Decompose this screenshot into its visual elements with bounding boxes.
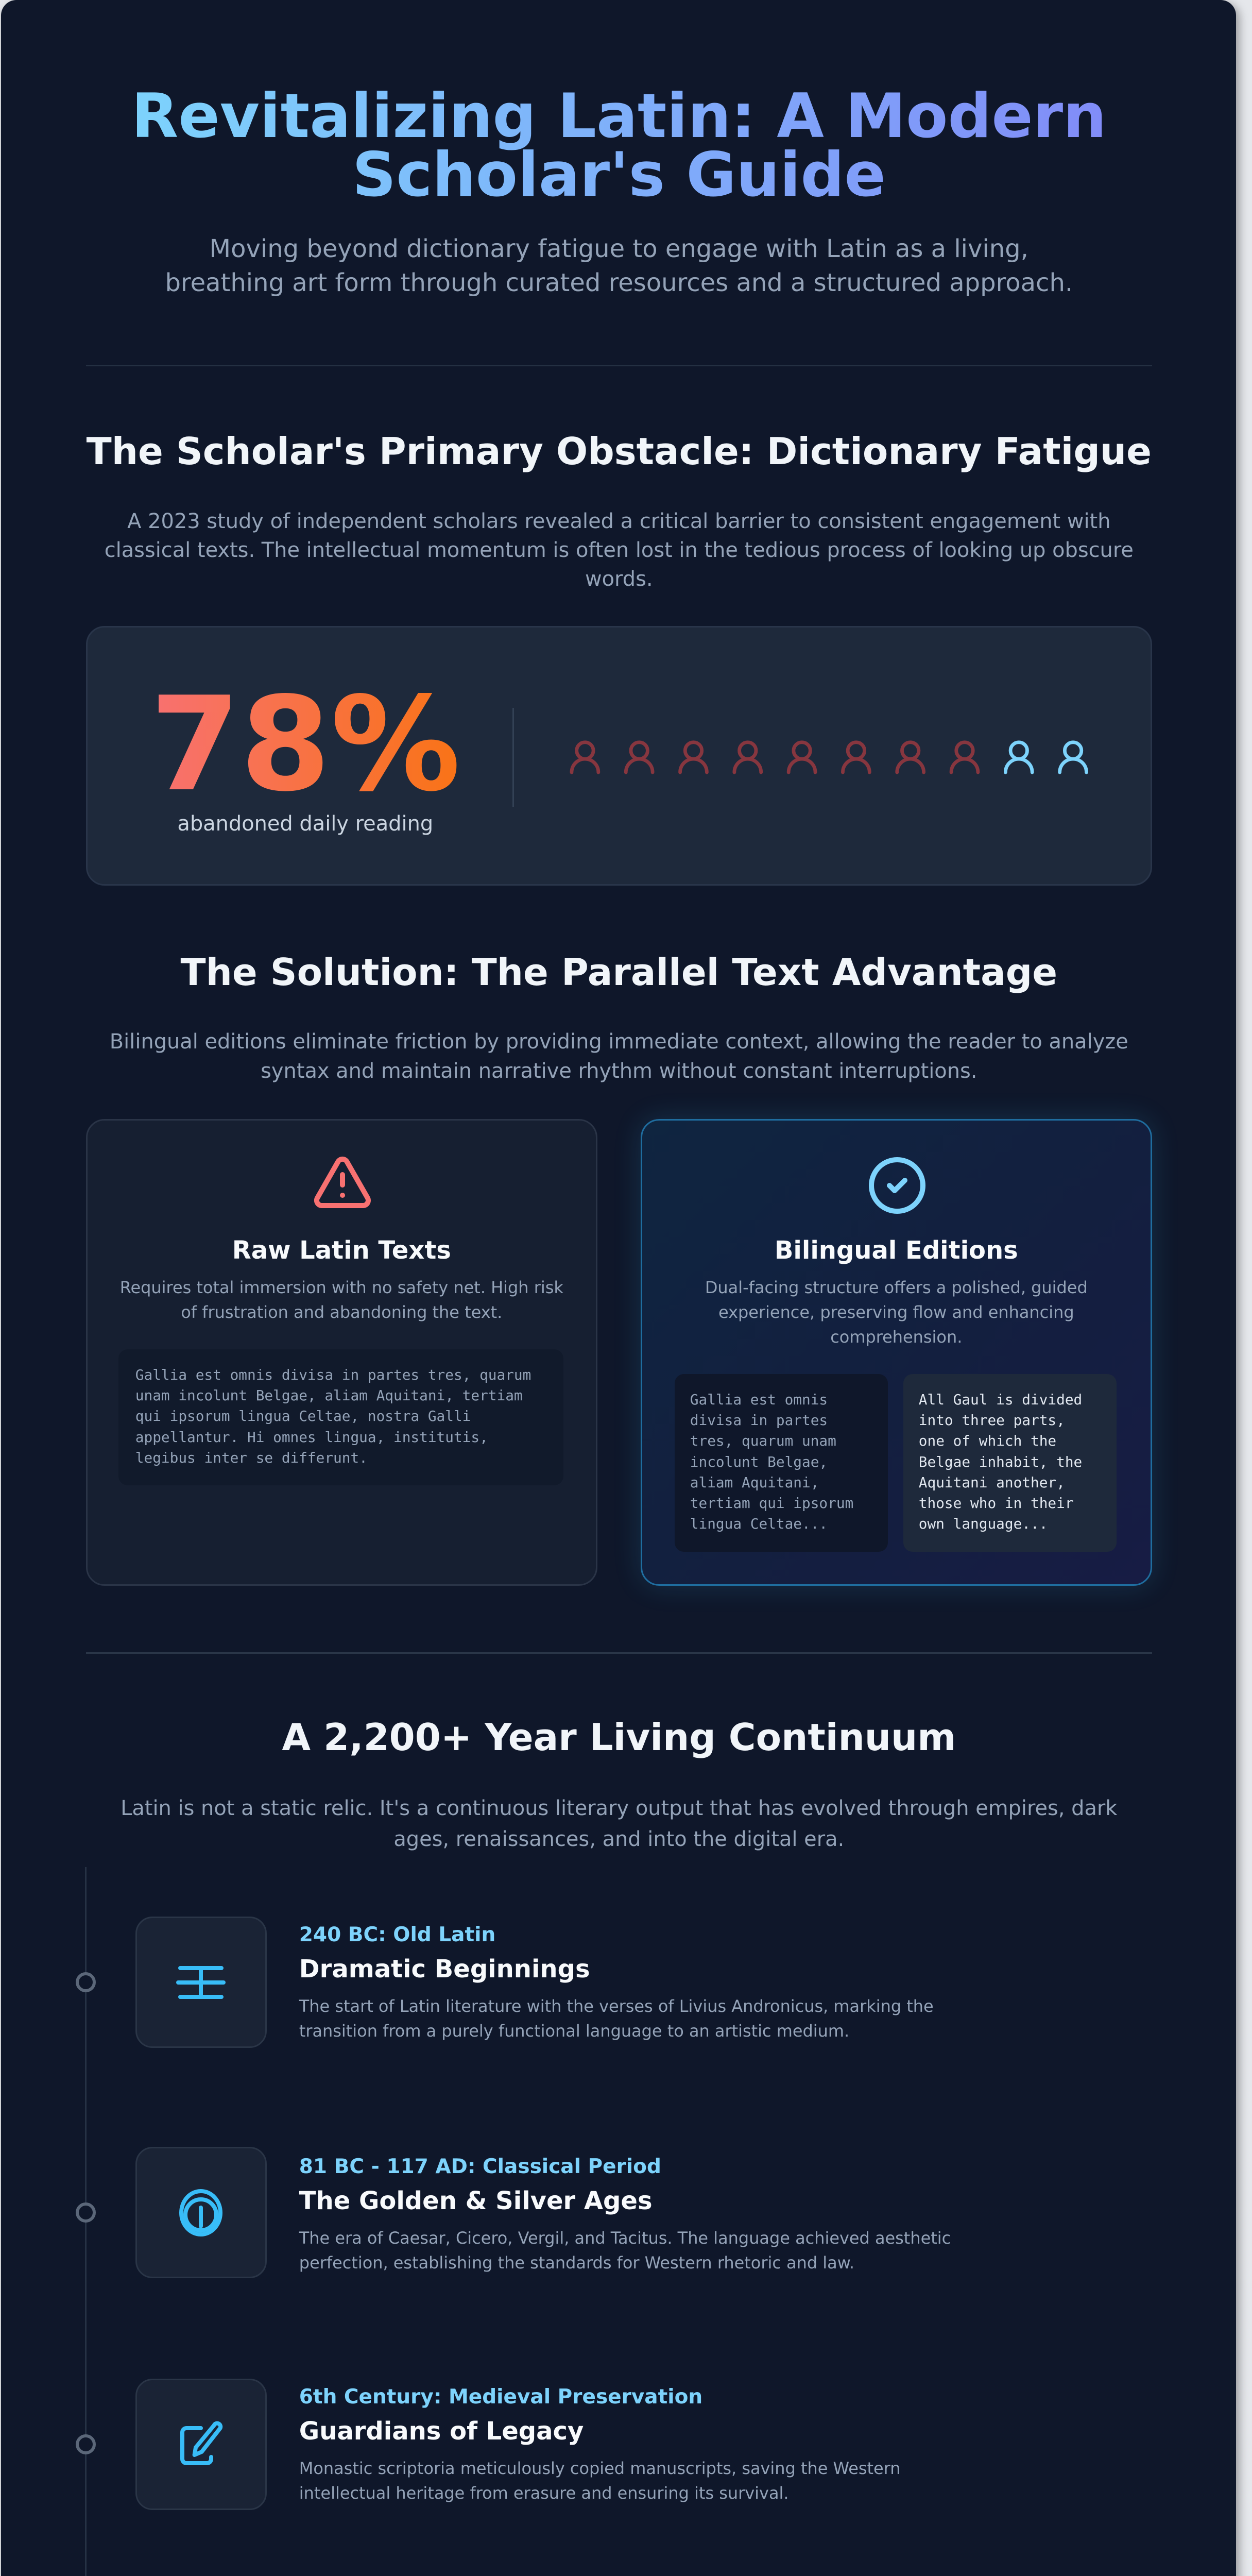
timeline item: classical: The Golden & Silver Ages	[299, 2187, 653, 2215]
card title: Raw Latin Texts	[232, 1236, 451, 1265]
english column	[903, 1374, 1117, 1552]
english column: All Gaul is divided	[919, 1391, 1082, 1408]
english column: into three parts,	[919, 1412, 1065, 1429]
latin passage: appellantur. Hi omnes lingua, institutis,	[135, 1429, 488, 1446]
latin column: aliam Aquitani,	[690, 1474, 819, 1491]
text: obstacle intro: classical texts. The intellectual momentum is often lost in the tedious process of looking up obscure	[105, 538, 1134, 562]
timeline item: old latin: The start of Latin literature with the verses of Livius Andronicus, marking the	[299, 1996, 934, 2016]
latin column: tres, quarum unam	[690, 1432, 836, 1449]
panel: raw latin texts	[86, 1119, 597, 1586]
english column: those who in their	[919, 1495, 1074, 1512]
timeline item: classical	[76, 2147, 951, 2278]
card description: Requires total immersion with no safety net. High risk	[120, 1278, 563, 1297]
subtitle: Moving beyond dictionary fatigue to engage with Latin as a living,	[210, 234, 1028, 263]
timeline item: medieval: Guardians of Legacy	[299, 2417, 584, 2446]
timeline item: old latin	[76, 1917, 934, 2048]
latin column: lingua Celtae...	[690, 1515, 828, 1532]
text: solution intro: Bilingual editions eliminate friction by providing immediate context, allowing the reader to analyze	[110, 1029, 1128, 1053]
panel: bilingual editions	[641, 1119, 1152, 1586]
card description	[705, 1278, 1088, 1347]
heading: continuum: A 2,200+ Year Living Continuum	[282, 1716, 956, 1759]
latin passage: legibus inter se differunt.	[135, 1449, 368, 1466]
latin column: incolunt Belgae,	[690, 1453, 828, 1470]
timeline item: medieval: intellectual heritage from erasure and ensuring its survival.	[299, 2483, 789, 2503]
timeline	[76, 1867, 951, 2576]
latin column	[675, 1374, 888, 1552]
card description	[120, 1278, 563, 1322]
icon: coin	[135, 2147, 267, 2278]
text: obstacle intro: words.	[585, 567, 653, 591]
icon: pen	[135, 2379, 267, 2510]
text: solution intro: syntax and maintain narrative rhythm without constant interruptions.	[261, 1059, 977, 1083]
panel: statistic	[86, 626, 1152, 886]
subtitle	[165, 234, 1073, 297]
card description: experience, preserving flow and enhancing	[718, 1302, 1074, 1322]
card description: of frustration and abandoning the text.	[181, 1302, 502, 1322]
icon: lines	[135, 1917, 267, 2048]
title	[131, 80, 1106, 210]
icon: check	[869, 1157, 925, 1214]
text: obstacle intro: A 2023 study of independent scholars revealed a critical barrier to consistent engagement with	[127, 510, 1110, 533]
timeline item: classical: The era of Caesar, Cicero, Vergil, and Tacitus. The language achieved aesthetic	[299, 2228, 951, 2248]
title: Revitalizing Latin: A Modern	[131, 80, 1106, 151]
latin passage	[118, 1349, 563, 1485]
text: solution intro	[110, 1029, 1128, 1083]
english column: Aquitani another,	[919, 1474, 1065, 1491]
english column: own language...	[919, 1515, 1048, 1532]
icon array: people	[570, 740, 1088, 774]
timeline item: old latin: transition from a purely functional language to an artistic medium.	[299, 2021, 849, 2041]
timeline item: classical: 81 BC - 117 AD: Classical Period	[299, 2155, 661, 2178]
heading: solution: The Solution: The Parallel Text Advantage	[180, 951, 1057, 994]
card description: Dual-facing structure offers a polished, guided	[705, 1278, 1088, 1297]
latin column: Gallia est omnis	[690, 1391, 828, 1408]
timeline item: old latin: Dramatic Beginnings	[299, 1955, 590, 1984]
english column: Belgae inhabit, the	[919, 1453, 1082, 1470]
timeline item: medieval: Monastic scriptoria meticulously copied manuscripts, saving the Western	[299, 2459, 901, 2478]
title: Scholar's Guide	[352, 139, 886, 210]
latin passage: qui ipsorum lingua Celtae, nostra Galli	[135, 1408, 471, 1425]
text: obstacle intro	[105, 510, 1134, 591]
english column: one of which the	[919, 1432, 1056, 1449]
card description: comprehension.	[830, 1327, 962, 1347]
card title: Bilingual Editions	[775, 1236, 1018, 1265]
timeline item: old latin: 240 BC: Old Latin	[299, 1923, 495, 1946]
latin column: divisa in partes	[690, 1412, 828, 1429]
text: continuum intro: Latin is not a static relic. It's a continuous literary output that has evolved through empires, dark	[121, 1797, 1117, 1820]
latin passage: Gallia est omnis divisa in partes tres, quarum	[135, 1366, 531, 1383]
heading: primary obstacle: The Scholar's Primary Obstacle: Dictionary Fatigue	[87, 430, 1152, 473]
text: continuum intro	[121, 1797, 1118, 1851]
latin column: tertiam qui ipsorum	[690, 1495, 853, 1512]
timeline item: medieval	[76, 2379, 901, 2510]
stat: 78%: 78%	[150, 669, 460, 820]
text: continuum intro: ages, renaissances, and into the digital era.	[393, 1827, 844, 1851]
subtitle: breathing art form through curated resources and a structured approach.	[165, 268, 1073, 297]
timeline item: medieval: 6th Century: Medieval Preservation	[299, 2385, 702, 2409]
timeline item: classical: perfection, establishing the standards for Western rhetoric and law.	[299, 2253, 854, 2273]
icon: warning	[314, 1156, 371, 1208]
stat label: abandoned daily reading	[177, 812, 433, 836]
latin passage: unam incolunt Belgae, aliam Aquitani, tertiam	[135, 1387, 523, 1404]
